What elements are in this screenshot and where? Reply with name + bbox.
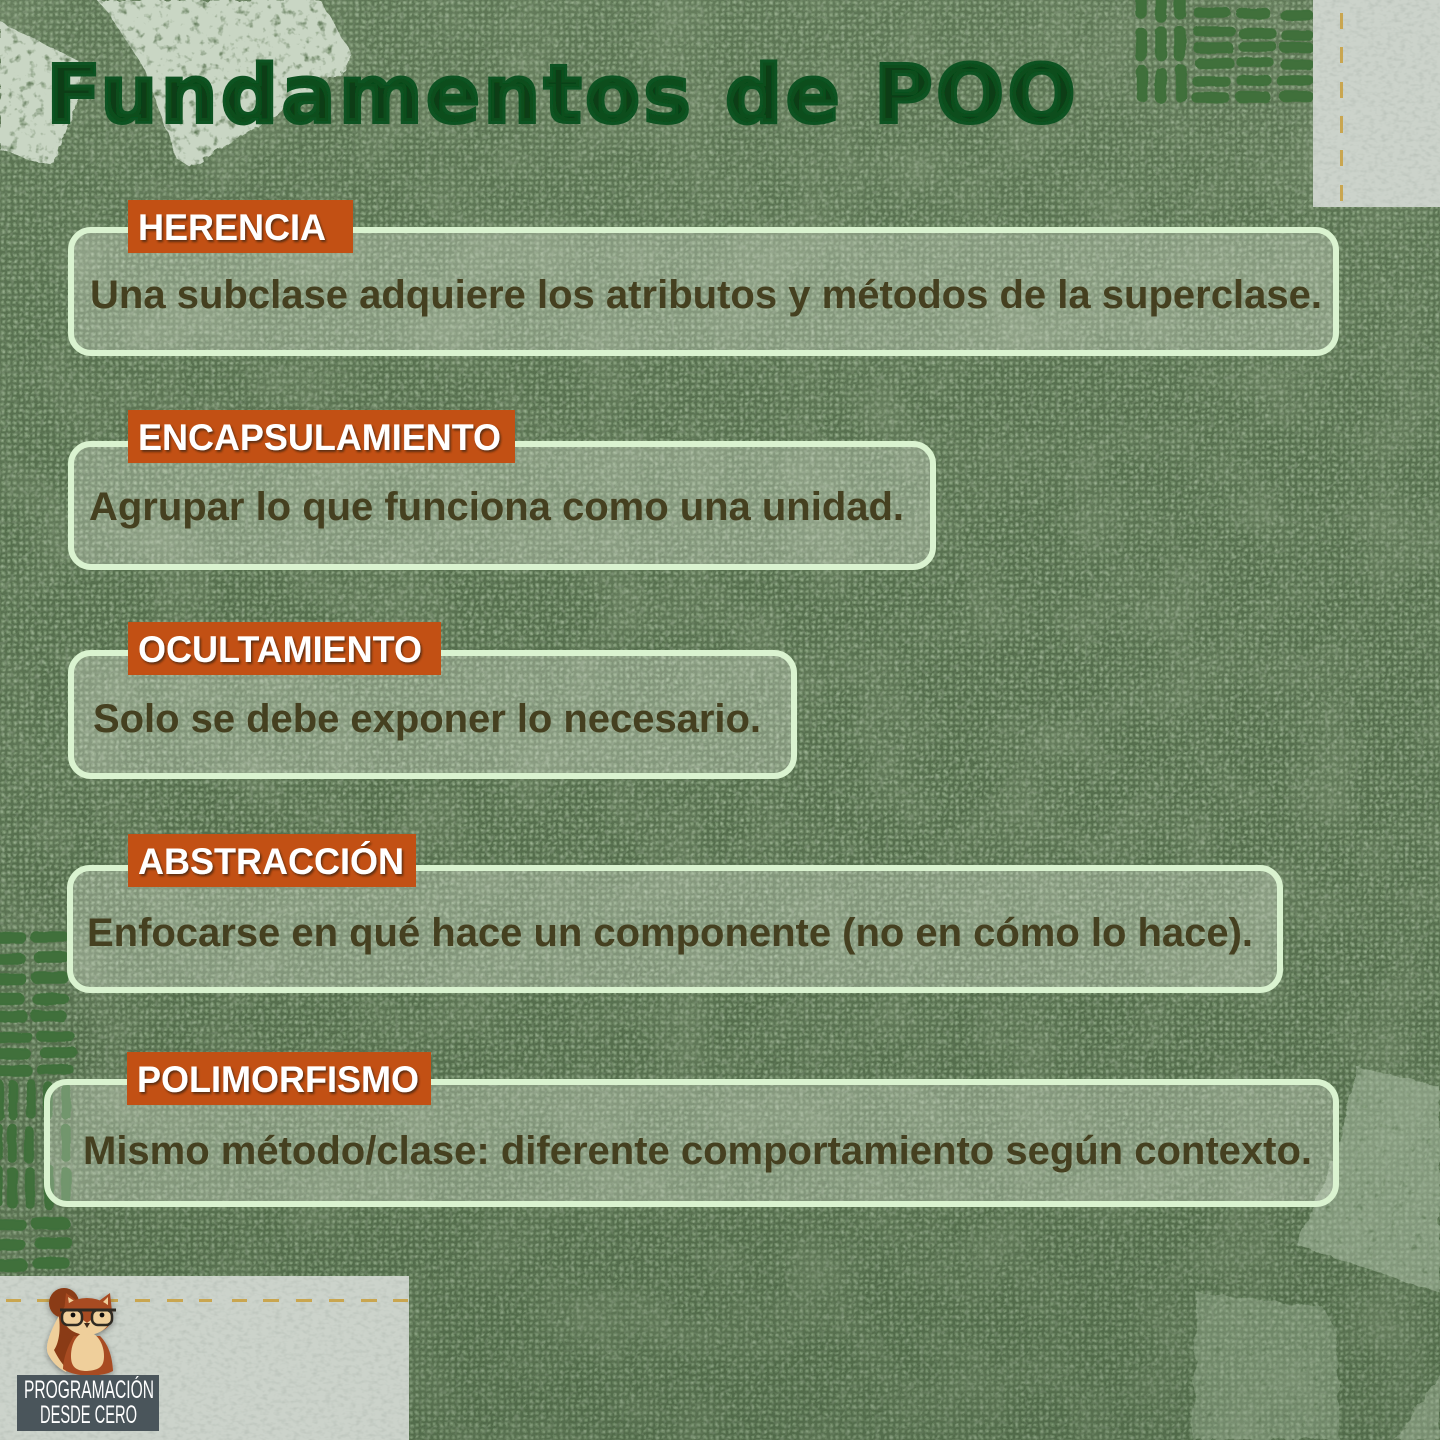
panel: ocultamiento <box>71 622 794 776</box>
logo badge: DESDE CERO <box>40 1401 137 1429</box>
title: Fundamentos de POO <box>46 48 1076 142</box>
tag label: OCULTAMIENTO <box>138 629 422 670</box>
panel box <box>71 444 933 567</box>
tag label: ABSTRACCIÓN <box>138 840 404 882</box>
tag label: ENCAPSULAMIENTO <box>138 417 501 458</box>
description: Mismo método/clase: diferente comportamiento según contexto. <box>83 1129 1312 1173</box>
panel: polimorfismo <box>47 1052 1336 1204</box>
description: Enfocarse en qué hace un componente (no en cómo lo hace). <box>87 911 1253 955</box>
decoration: stitches left side <box>0 932 77 1271</box>
description: Agrupar lo que funciona como una unidad. <box>89 485 904 529</box>
panel: encapsulamiento <box>71 410 933 567</box>
tag <box>128 410 515 463</box>
logo badge <box>17 1375 159 1431</box>
tag <box>128 200 353 253</box>
tag label: HERENCIA <box>138 207 326 248</box>
tag <box>127 1052 431 1105</box>
logo badge: PROGRAMACIÓN <box>24 1375 154 1404</box>
decoration: stitches top right <box>1136 0 1313 103</box>
decoration: paper patch bottom left with stitching <box>0 1276 409 1440</box>
panel box <box>47 1082 1336 1204</box>
description: Solo se debe exponer lo necesario. <box>93 697 761 741</box>
panel box <box>71 230 1336 353</box>
tag <box>128 622 441 675</box>
tag label: POLIMORFISMO <box>137 1059 419 1100</box>
decoration: brush marks bottom right <box>1193 1067 1440 1440</box>
panel: abstraccion <box>70 834 1280 990</box>
icon: squirrel with glasses <box>47 1288 116 1376</box>
decoration: brush marks top left <box>0 0 352 167</box>
panel box <box>71 653 794 776</box>
description: Una subclase adquiere los atributos y métodos de la superclase. <box>90 273 1322 317</box>
panel: herencia <box>71 200 1336 353</box>
panel box <box>70 868 1280 990</box>
decoration: paper patch top right with stitching <box>1313 0 1440 207</box>
tag <box>128 834 416 887</box>
